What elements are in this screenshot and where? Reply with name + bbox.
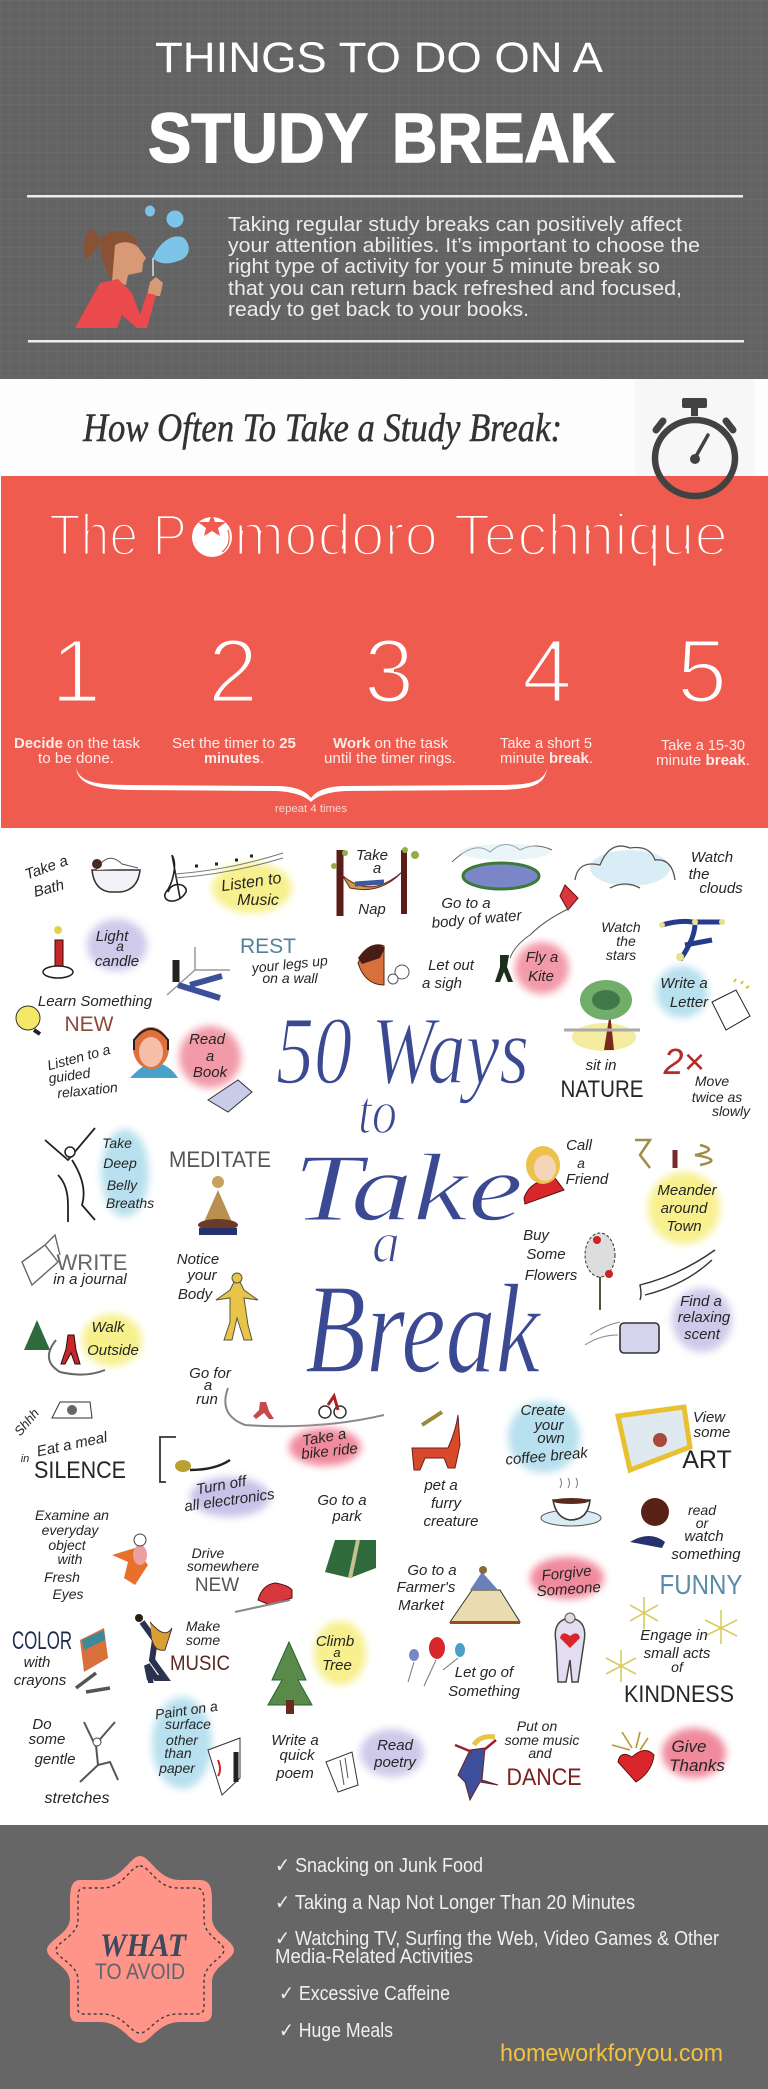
item: take a nap bbox=[331, 847, 419, 918]
list: things to avoid: ✓ Snacking on Junk Food bbox=[275, 1855, 483, 1877]
heading: pomodoro: The P bbox=[49, 503, 187, 568]
item: move twice as slowly: slowly bbox=[712, 1103, 751, 1119]
illustration title: Take bbox=[293, 1134, 523, 1241]
item: take a bath: Take a bbox=[23, 852, 70, 883]
item: create your own coffee break bbox=[505, 1401, 601, 1526]
item: go to a body of water: Go to a bbox=[441, 895, 491, 912]
illustration title: to bbox=[358, 1079, 397, 1147]
item: engage in small acts of kindness: small acts bbox=[644, 1645, 711, 1662]
item: call a friend: Friend bbox=[566, 1171, 609, 1188]
item: take a bath: Bath bbox=[32, 876, 66, 901]
item: write a quick poem: quick bbox=[279, 1747, 316, 1764]
item: take deep belly breaths: Deep bbox=[103, 1155, 137, 1171]
item: write a letter bbox=[656, 966, 750, 1030]
step captions: minute break. bbox=[656, 752, 750, 769]
item: engage in small acts of kindness bbox=[606, 1597, 737, 1708]
item: meditate bbox=[169, 1147, 271, 1235]
item: sit in nature bbox=[560, 980, 644, 1103]
item: take deep belly breaths: Breaths bbox=[106, 1195, 154, 1211]
item: rest your legs up on a wall: your legs up bbox=[250, 952, 329, 976]
step numbers: 3 bbox=[364, 622, 414, 722]
intro text block: right type of activity for your 5 minute break so bbox=[228, 256, 660, 278]
item: find a relaxing scent: Find a bbox=[680, 1293, 722, 1310]
item: engage in small acts of kindness: Engage in bbox=[640, 1627, 708, 1644]
item: listen to a guided relaxation bbox=[45, 1027, 178, 1101]
item: listen to music: Music bbox=[237, 892, 279, 909]
item: write in a journal: WRITE bbox=[57, 1250, 127, 1275]
item: give thanks: Thanks bbox=[669, 1756, 725, 1775]
item: drive somewhere new: somewhere bbox=[187, 1558, 259, 1574]
item: watch the clouds: clouds bbox=[699, 880, 743, 897]
list: things to avoid: ✓ Huge Meals bbox=[279, 2020, 393, 2042]
title line two: STUDY bbox=[148, 99, 368, 177]
step captions: Decide on the task bbox=[14, 735, 140, 752]
item: light a candle bbox=[43, 919, 147, 978]
item: do some gentle stretches: some bbox=[29, 1731, 65, 1748]
item: make some music bbox=[135, 1614, 230, 1680]
item: turn off all electronics bbox=[160, 1437, 276, 1517]
item: let out a sigh bbox=[358, 945, 475, 992]
item: find a relaxing scent: scent bbox=[684, 1326, 721, 1343]
step numbers: 1 bbox=[51, 622, 101, 722]
item: move twice as slowly bbox=[662, 1041, 751, 1119]
step numbers: 5 bbox=[677, 622, 727, 722]
list: things to avoid: ✓ Watching TV, Surfing the Web, Video Games & Other bbox=[275, 1928, 719, 1950]
illustration title bbox=[276, 997, 542, 1400]
item: let out a sigh: a sigh bbox=[422, 975, 462, 992]
icon: tomato bbox=[192, 514, 232, 557]
panel: what to avoid bbox=[0, 1825, 768, 2089]
item: notice your body bbox=[177, 1251, 258, 1340]
item: put on some music and dance: some music bbox=[505, 1732, 579, 1748]
item: pet a furry creature bbox=[412, 1412, 479, 1530]
item: examine an everyday object: Fresh bbox=[44, 1569, 80, 1585]
item: make some music: Make bbox=[186, 1618, 220, 1634]
item: paint on a surface bbox=[152, 1697, 240, 1795]
item: eat a meal in silence: SILENCE bbox=[34, 1457, 126, 1484]
item: write in a journal bbox=[22, 1235, 127, 1288]
item: buy some flowers: Buy bbox=[523, 1227, 550, 1244]
brace: repeat bbox=[76, 768, 547, 802]
item: meander around town: Town bbox=[666, 1218, 702, 1235]
item: go to a park: Go to a bbox=[317, 1492, 367, 1509]
panel: header bbox=[0, 0, 768, 379]
item: buy some flowers: Flowers bbox=[525, 1267, 578, 1284]
item: listen to a guided relaxation: Listen to a bbox=[45, 1041, 112, 1073]
title line two bbox=[148, 99, 615, 177]
item: examine an everyday object: with bbox=[58, 1551, 83, 1567]
item: read a book: Book bbox=[193, 1064, 229, 1081]
item: make some music: MUSIC bbox=[170, 1652, 230, 1675]
item: watch the stars: Watch bbox=[601, 919, 641, 935]
item: read a book: Read bbox=[189, 1031, 226, 1048]
item: take a nap: Nap bbox=[358, 901, 386, 918]
item: put on some music and dance: Put on bbox=[517, 1718, 557, 1734]
item: paint on a surface: other bbox=[166, 1732, 199, 1748]
item: color with crayons: crayons bbox=[14, 1672, 67, 1689]
item: color with crayons: with bbox=[24, 1654, 50, 1671]
item: examine an everyday object: object bbox=[48, 1537, 87, 1553]
step captions: Set the timer to 25 bbox=[172, 735, 296, 752]
item: take deep belly breaths: Belly bbox=[107, 1177, 138, 1193]
item: meander around town bbox=[635, 1140, 720, 1244]
item: walk outside: Walk bbox=[91, 1319, 126, 1336]
item: do some gentle stretches: gentle bbox=[35, 1751, 75, 1768]
item: buy some flowers: Some bbox=[526, 1246, 566, 1263]
item: read or watch something funny: watch bbox=[684, 1528, 724, 1545]
item: notice your body: your bbox=[186, 1267, 218, 1284]
item: forgive someone: Someone bbox=[536, 1579, 601, 1600]
item: light a candle: Light bbox=[96, 928, 129, 945]
item: view some art bbox=[618, 1407, 732, 1474]
item: walk outside: Outside bbox=[87, 1342, 139, 1359]
item: read poetry: Read bbox=[377, 1737, 414, 1754]
item: write a quick poem bbox=[271, 1732, 358, 1792]
badge: what to avoid: WHAT bbox=[100, 1928, 188, 1964]
icon: stopwatch bbox=[655, 398, 735, 496]
item: read or watch something funny: or bbox=[696, 1515, 710, 1531]
illustration title: a bbox=[372, 1210, 400, 1275]
item: notice your body: Notice bbox=[177, 1251, 219, 1268]
item: go to a body of water bbox=[431, 844, 552, 932]
item: go for a run: Go for bbox=[189, 1365, 232, 1382]
item: go for a run: run bbox=[196, 1391, 218, 1408]
item: move twice as slowly: twice as bbox=[692, 1089, 742, 1105]
item: walk outside bbox=[24, 1314, 142, 1375]
item: let go of something: Let go of bbox=[455, 1664, 515, 1681]
item: give thanks bbox=[612, 1728, 726, 1782]
item: watch the clouds: the bbox=[689, 866, 709, 883]
step captions bbox=[14, 735, 750, 769]
panel: 50 ways to take a break bbox=[0, 828, 768, 1825]
title line one: THINGS TO DO ON A bbox=[155, 34, 603, 82]
item: view some art: View bbox=[693, 1409, 726, 1426]
step captions: to be done. bbox=[38, 750, 114, 767]
item: drive somewhere new: NEW bbox=[195, 1575, 239, 1596]
item: forgive someone bbox=[530, 1557, 604, 1682]
heading: how often: How Often To Take a Study Break: bbox=[82, 405, 562, 450]
item: color with crayons: COLOR bbox=[12, 1627, 72, 1655]
item: watch the clouds bbox=[575, 846, 743, 897]
step captions: Take a short 5 bbox=[500, 735, 592, 752]
item: go to a park: park bbox=[331, 1508, 363, 1525]
item: let go of something: Something bbox=[448, 1683, 521, 1700]
step captions: Take a 15-30 bbox=[661, 737, 745, 754]
item: read a book: a bbox=[206, 1048, 214, 1065]
item: read or watch something funny bbox=[630, 1498, 743, 1600]
item: view some art: ART bbox=[682, 1446, 732, 1474]
item: examine an everyday object: everyday bbox=[42, 1522, 99, 1538]
item: fly a kite: Kite bbox=[528, 968, 554, 985]
item: take deep belly breaths: Take bbox=[102, 1135, 132, 1151]
item: fly a kite bbox=[495, 885, 578, 994]
intro text block: your attention abilities. It’s important to choose the bbox=[228, 235, 700, 257]
item: watch the stars: stars bbox=[606, 947, 636, 963]
item: examine an everyday object: Eyes bbox=[52, 1586, 84, 1602]
item: notice your body: Body bbox=[178, 1286, 214, 1303]
item: write a quick poem: poem bbox=[275, 1765, 314, 1782]
item: eat a meal in silence bbox=[11, 1402, 126, 1484]
item: call a friend: a bbox=[577, 1155, 585, 1171]
item: take a bike ride: bike ride bbox=[300, 1440, 359, 1463]
item: sit in nature: NATURE bbox=[560, 1076, 644, 1103]
item: learn something new: Learn Something bbox=[38, 993, 153, 1010]
item: eat a meal in silence: Eat a meal bbox=[35, 1429, 110, 1460]
item: read poetry bbox=[360, 1729, 424, 1777]
item: call a friend bbox=[524, 1137, 609, 1204]
item: go to a farmers market: Market bbox=[398, 1597, 445, 1614]
step captions: until the timer rings. bbox=[324, 750, 456, 767]
item: eat a meal in silence: in bbox=[21, 1453, 29, 1465]
illustration title: Break bbox=[305, 1258, 542, 1400]
item: put on some music and dance bbox=[455, 1718, 582, 1800]
item: rest your legs up on a wall: REST bbox=[240, 935, 296, 958]
website credit: homeworkforyou.com bbox=[500, 2040, 723, 2067]
item: sit in nature: sit in bbox=[586, 1057, 616, 1074]
illustration title: 50 Ways bbox=[276, 997, 529, 1104]
item: take a bath bbox=[23, 852, 140, 901]
item: light a candle: candle bbox=[95, 953, 139, 970]
item: paint on a surface: surface bbox=[165, 1716, 211, 1732]
item: drive somewhere new bbox=[187, 1545, 292, 1612]
item: take a bike ride bbox=[289, 1396, 361, 1466]
item: read or watch something funny: something bbox=[671, 1546, 741, 1563]
step numbers: 2 bbox=[208, 622, 258, 722]
item: create your own coffee break: your bbox=[533, 1417, 565, 1434]
item: take a nap: a bbox=[373, 860, 381, 877]
item: write a quick poem: Write a bbox=[271, 1732, 319, 1749]
item: examine an everyday object: Examine an bbox=[35, 1507, 109, 1523]
item: do some gentle stretches bbox=[29, 1716, 118, 1807]
item: read poetry: poetry bbox=[373, 1754, 417, 1771]
item: write a letter: Letter bbox=[670, 994, 709, 1011]
badge: what to avoid bbox=[47, 1856, 234, 2043]
item: climb a tree: a bbox=[333, 1645, 341, 1660]
item: engage in small acts of kindness: KINDNESS bbox=[624, 1681, 734, 1708]
item: climb a tree: Tree bbox=[322, 1657, 352, 1674]
item: turn off all electronics: Turn off bbox=[195, 1472, 249, 1498]
item: light a candle: a bbox=[116, 938, 124, 954]
item: go to a farmers market bbox=[397, 1562, 520, 1624]
list: things to avoid: ✓ Excessive Caffeine bbox=[279, 1983, 450, 2005]
item: find a relaxing scent: relaxing bbox=[678, 1309, 731, 1326]
item: read a book bbox=[179, 1026, 252, 1112]
item: forgive someone: Forgive bbox=[541, 1562, 592, 1585]
item: create your own coffee break: Create bbox=[520, 1402, 566, 1419]
intro text block: that you can return back refreshed and focused, bbox=[228, 278, 682, 300]
item: learn something new bbox=[16, 993, 153, 1036]
item: paint on a surface: Paint on a bbox=[154, 1698, 219, 1722]
step numbers: 4 bbox=[522, 622, 572, 722]
item: meander around town: Meander bbox=[657, 1182, 718, 1199]
item: turn off all electronics: all electronics bbox=[183, 1486, 276, 1515]
item: listen to music: Listen to bbox=[220, 870, 283, 895]
item: meander around town: around bbox=[661, 1200, 708, 1217]
title line two: BREAK bbox=[392, 99, 615, 177]
item: take a nap: Take bbox=[356, 847, 388, 864]
item: examine an everyday object bbox=[35, 1507, 148, 1602]
item: create your own coffee break: own bbox=[537, 1430, 565, 1447]
item: watch the clouds: Watch bbox=[691, 849, 733, 866]
item: go for a run: a bbox=[204, 1377, 212, 1394]
item: call a friend: Call bbox=[566, 1137, 593, 1154]
item: take deep belly breaths bbox=[45, 1128, 154, 1222]
badge: what to avoid: TO AVOID bbox=[95, 1959, 185, 1984]
item: go to a body of water: body of water bbox=[431, 907, 523, 932]
item: create your own coffee break: coffee break bbox=[505, 1444, 590, 1469]
item: go for a run bbox=[189, 1365, 384, 1426]
item: let go of something bbox=[408, 1637, 521, 1700]
item: put on some music and dance: DANCE bbox=[506, 1764, 582, 1791]
panel: how often bbox=[0, 379, 768, 476]
note: repeat 4 times: repeat 4 times bbox=[275, 803, 348, 815]
item: paint on a surface: paper bbox=[158, 1760, 196, 1776]
list: things to avoid: Media-Related Activities bbox=[275, 1946, 473, 1968]
item: learn something new: NEW bbox=[64, 1013, 114, 1036]
item: pet a furry creature: furry bbox=[431, 1495, 462, 1512]
item: listen to music bbox=[165, 853, 292, 913]
step captions: minute break. bbox=[500, 750, 593, 767]
item: fly a kite: Fly a bbox=[526, 949, 558, 966]
item: find a relaxing scent bbox=[585, 1250, 732, 1353]
item: buy some flowers bbox=[523, 1227, 615, 1310]
item: engage in small acts of kindness: of bbox=[671, 1659, 685, 1675]
item: read or watch something funny: FUNNY bbox=[660, 1569, 743, 1600]
step captions: Work on the task bbox=[333, 735, 448, 752]
list: things to avoid: ✓ Taking a Nap Not Longer Than 20 Minutes bbox=[275, 1892, 635, 1914]
item: climb a tree: Climb bbox=[316, 1633, 354, 1650]
item: go to a farmers market: Go to a bbox=[407, 1562, 457, 1579]
item: do some gentle stretches: Do bbox=[32, 1716, 52, 1733]
item: listen to a guided relaxation: relaxation bbox=[56, 1079, 119, 1101]
item: let out a sigh: Let out bbox=[428, 957, 475, 974]
item: watch the stars bbox=[601, 919, 725, 963]
icon: girl blowing bubbles bbox=[75, 206, 189, 328]
step numbers bbox=[51, 622, 727, 722]
item: pet a furry creature: creature bbox=[423, 1513, 479, 1530]
item: move twice as slowly: 2× bbox=[662, 1041, 705, 1082]
item: take a bike ride: Take a bbox=[301, 1425, 348, 1450]
item: go to a farmers market: Farmer's bbox=[397, 1579, 456, 1596]
item: color with crayons bbox=[12, 1627, 110, 1692]
intro text block: ready to get back to your books. bbox=[228, 299, 529, 321]
item: rest your legs up on a wall bbox=[167, 935, 329, 998]
item: pet a furry creature: pet a bbox=[423, 1477, 458, 1494]
item: climb a tree bbox=[268, 1621, 366, 1714]
item: read or watch something funny: read bbox=[688, 1502, 717, 1518]
item: eat a meal in silence: Shhh bbox=[11, 1406, 42, 1439]
item: meditate: MEDITATE bbox=[169, 1147, 271, 1172]
intro text block bbox=[228, 214, 700, 321]
item: listen to a guided relaxation: guided bbox=[47, 1064, 92, 1086]
item: write a letter: Write a bbox=[660, 975, 708, 992]
item: make some music: some bbox=[186, 1632, 220, 1648]
item: paint on a surface: than bbox=[164, 1745, 192, 1761]
item: go to a park bbox=[317, 1492, 376, 1578]
heading: pomodoro: modoro Technique bbox=[234, 503, 728, 568]
step captions: minutes. bbox=[204, 750, 264, 767]
item: move twice as slowly: Move bbox=[695, 1073, 729, 1089]
intro text block: Taking regular study breaks can positively affect bbox=[228, 214, 682, 236]
item: write in a journal: in a journal bbox=[53, 1271, 127, 1288]
item: watch the stars: the bbox=[616, 933, 636, 949]
item: view some art: some bbox=[694, 1424, 730, 1441]
item: rest your legs up on a wall: on a wall bbox=[262, 970, 319, 986]
item: do some gentle stretches: stretches bbox=[45, 1790, 109, 1807]
item: put on some music and dance: and bbox=[528, 1745, 553, 1761]
list: things to avoid bbox=[275, 1855, 719, 2042]
panel: pomodoro technique bbox=[1, 476, 768, 828]
item: give thanks: Give bbox=[672, 1737, 706, 1756]
item: drive somewhere new: Drive bbox=[192, 1545, 225, 1561]
